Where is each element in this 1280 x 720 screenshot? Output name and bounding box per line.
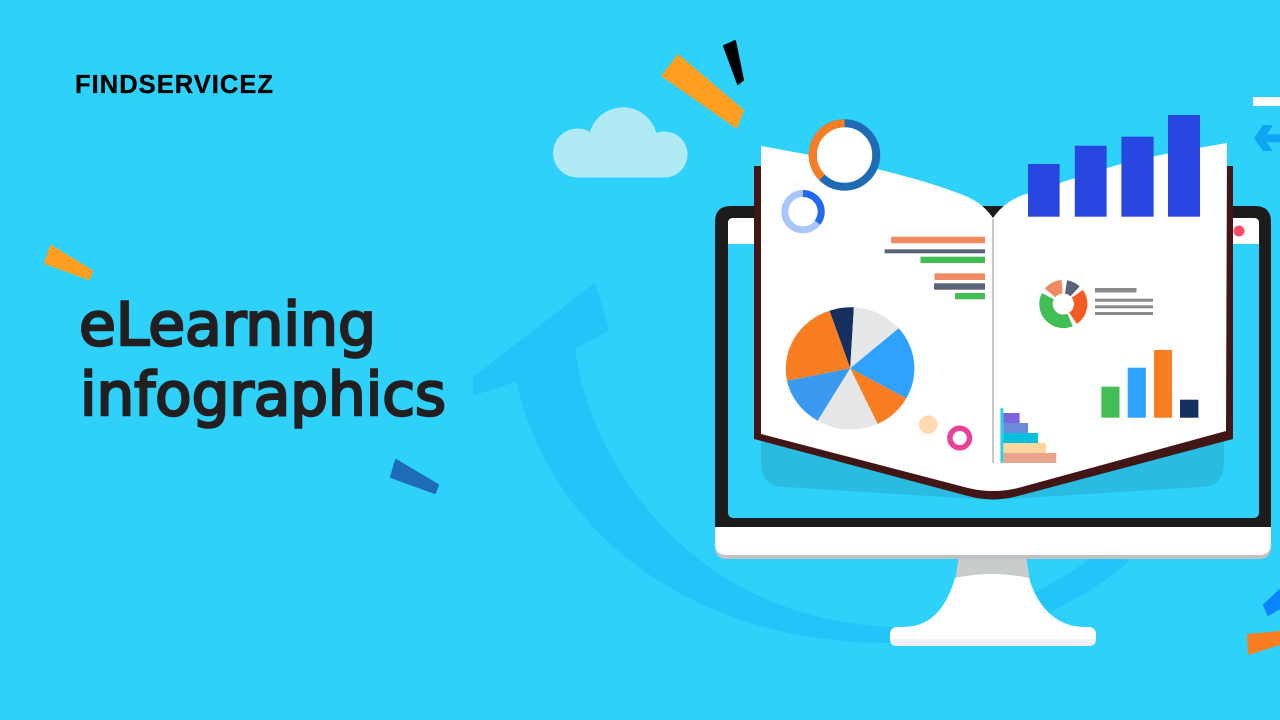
title: eLearning	[79, 290, 376, 360]
monitor screen	[728, 218, 1259, 518]
chart: column bars	[1101, 350, 1198, 418]
accent: orange slash left	[45, 246, 92, 279]
monitor bezel	[715, 206, 1271, 527]
monitor stand	[890, 556, 1096, 646]
book spine	[992, 219, 994, 463]
accent: black slash top	[724, 41, 743, 84]
monitor chin	[715, 527, 1271, 559]
icon: cloud	[553, 107, 688, 178]
monitor	[715, 206, 1271, 646]
chart: small ring	[785, 193, 821, 230]
title	[79, 290, 446, 430]
chart: stair bars	[1000, 408, 1056, 463]
pink ring	[950, 428, 970, 448]
book pages	[761, 143, 1227, 491]
chart: blue bars	[1028, 115, 1200, 217]
peach dot	[919, 415, 938, 434]
chart: horizontal bars	[885, 237, 985, 299]
chart: large ring	[813, 123, 876, 187]
chart: pie	[786, 307, 914, 430]
accent: blue slash left	[391, 460, 438, 493]
book	[754, 143, 1233, 500]
book cover	[754, 166, 1233, 500]
text lines beside donut	[1095, 288, 1153, 315]
accent: blue slash bottom right	[1264, 590, 1280, 615]
background curved arrow	[475, 286, 1127, 641]
title: infographics	[80, 360, 446, 430]
book shadow	[761, 425, 1224, 500]
accent: orange slash bottom right	[1247, 631, 1280, 655]
icon: blue arrow right	[1254, 125, 1280, 151]
accent: orange slash top	[661, 54, 744, 129]
accent: white bar right	[1253, 97, 1280, 106]
brand name: FINDSERVICEZ	[75, 71, 273, 99]
chart: segmented donut	[1046, 287, 1081, 321]
